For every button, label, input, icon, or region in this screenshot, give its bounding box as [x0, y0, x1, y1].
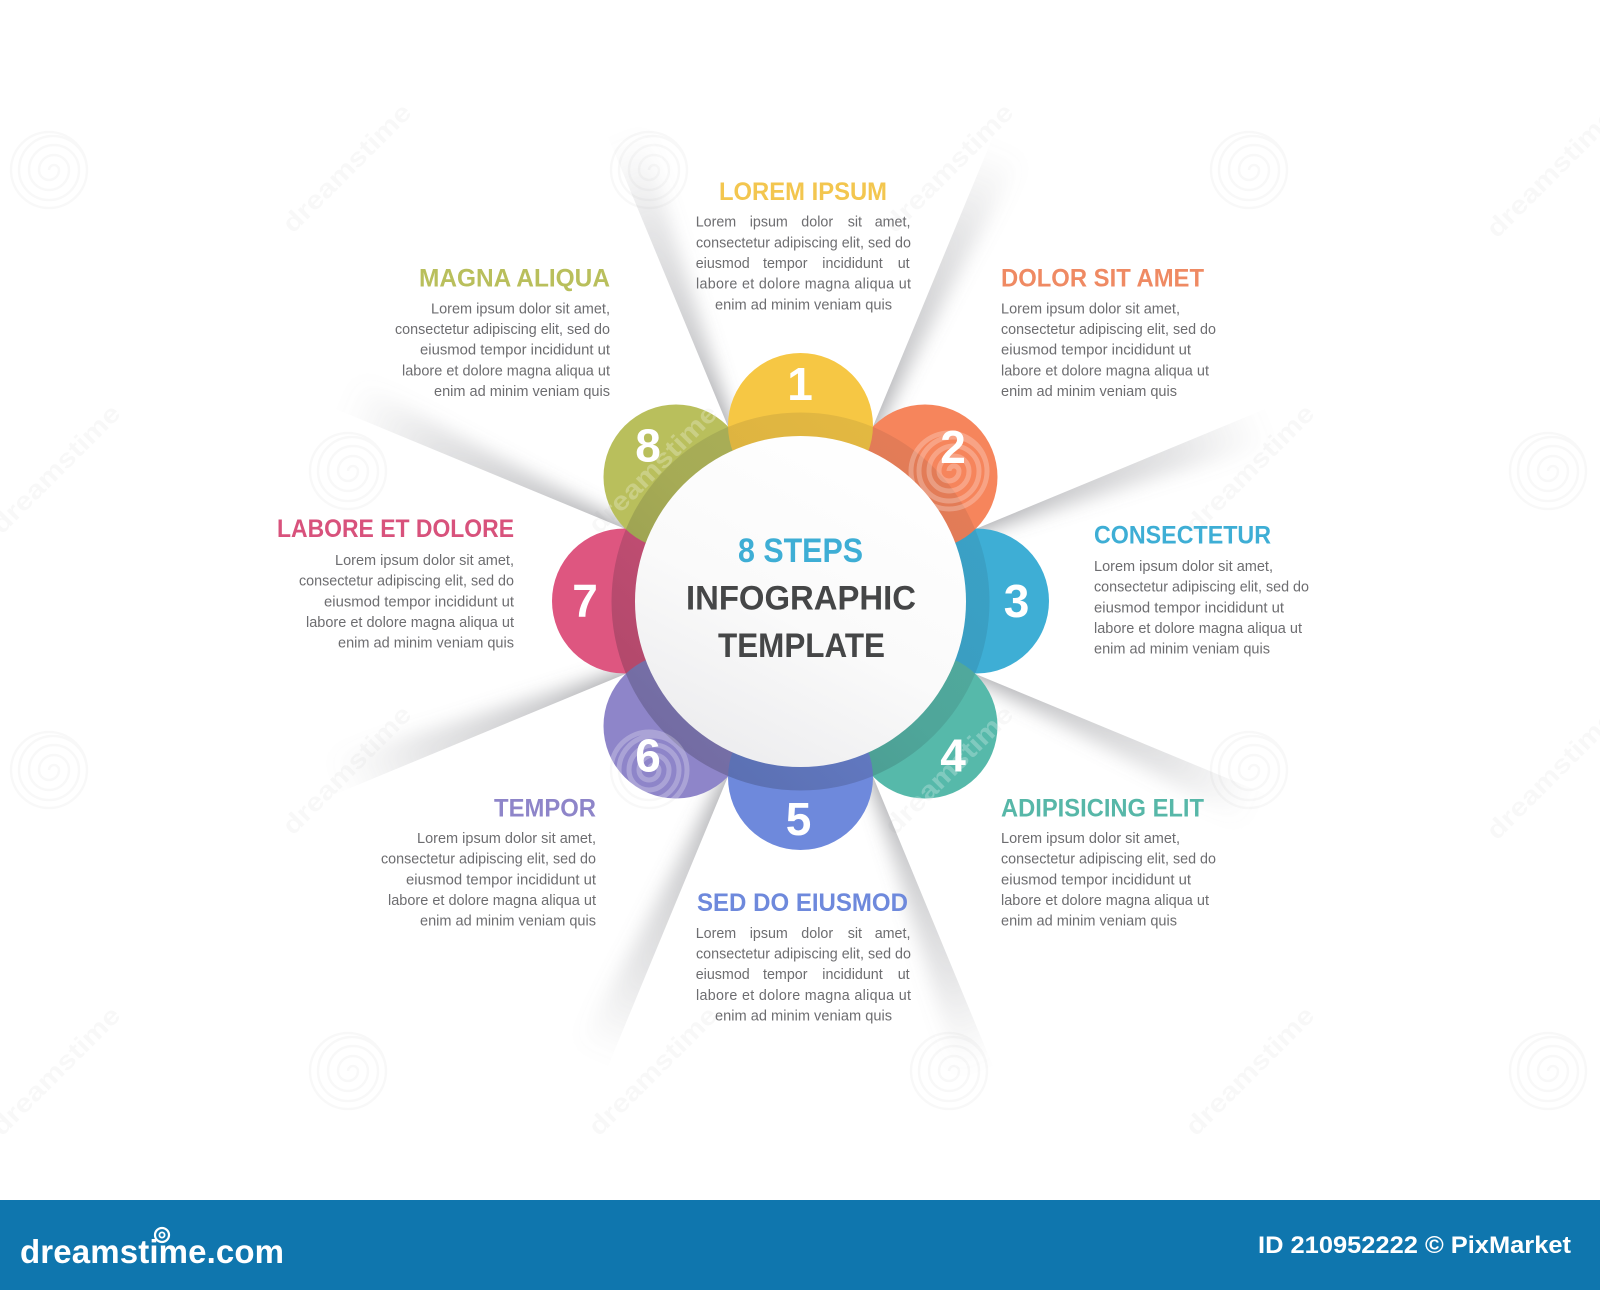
- body: step 5: incididunt: [822, 967, 883, 983]
- heading: dolor sit amet: DOLOR SIT AMET: [1001, 265, 1204, 293]
- heading: consectetur: CONSECTETUR: [1094, 521, 1271, 549]
- body: step 2: enim ad minim veniam quis: [1001, 384, 1177, 400]
- body: step 4: consectetur adipiscing elit, sed do: [1001, 852, 1216, 868]
- centre disc: [635, 436, 966, 767]
- number 6: 6: [635, 730, 661, 782]
- body: step 3: labore et dolore magna aliqua ut: [1094, 621, 1302, 637]
- shadow ray: between steps 3 and 4: [948, 641, 1274, 826]
- body: step 3: enim ad minim veniam quis: [1094, 642, 1270, 658]
- body: step 3: eiusmod tempor incididunt ut: [1094, 600, 1284, 616]
- shadow ray: between steps 2 and 3: [951, 382, 1276, 568]
- step numbers: [572, 358, 1029, 845]
- body: step 2: [1001, 301, 1216, 400]
- number 7: 7: [572, 574, 598, 626]
- body: step 8: [395, 301, 610, 400]
- body: step 7: labore et dolore magna aliqua ut: [306, 615, 514, 631]
- text block: step 2: [1001, 265, 1216, 400]
- text block: step 5: [696, 889, 911, 1024]
- heading: adipisicing elit: ADIPISICING ELIT: [1001, 794, 1204, 822]
- title line: template: TEMPLATE: [718, 627, 885, 665]
- body: step 1: enim ad minim veniam quis: [715, 297, 892, 313]
- body: step 1: tempor: [763, 256, 808, 272]
- title line: 8 steps: 8 STEPS: [738, 532, 863, 570]
- watermark layer under the artwork: dreamstime: [276, 97, 417, 238]
- text block: step 1: [696, 178, 911, 313]
- petal ring: eight numbered circles: [552, 353, 1049, 850]
- watermark layer under the artwork: dreamstime: [1179, 1000, 1320, 1141]
- body: step 3: consectetur adipiscing elit, sed do: [1094, 580, 1309, 596]
- watermark layer under the artwork: dreamstime: [878, 699, 1019, 840]
- petal 2: [852, 404, 998, 550]
- footer bar: [0, 1200, 1600, 1290]
- body: step 3: [1094, 559, 1309, 658]
- body: step 7: [299, 553, 514, 652]
- body: step 1: dolor: [801, 215, 833, 231]
- dark band cast by the centre disc on the petals: [612, 412, 990, 790]
- body: step 1: sit: [848, 215, 862, 231]
- heading: sed do eiusmod: SED DO EIUSMOD: [697, 889, 908, 917]
- footer image id and credit: ID 210952222 © PixMarket: [1258, 1232, 1571, 1259]
- shadow ray: between steps 1 and 2: [840, 128, 1025, 454]
- centre title: [686, 532, 916, 665]
- body: step 1: amet,: [875, 215, 910, 231]
- body: step 2: consectetur adipiscing elit, sed do: [1001, 322, 1216, 338]
- body: step 7: consectetur adipiscing elit, sed do: [299, 574, 514, 590]
- petal 5: [728, 705, 873, 850]
- text block: step 6: [381, 794, 596, 930]
- body: step 5: eiusmod: [696, 967, 750, 983]
- heading: tempor: TEMPOR: [494, 794, 596, 822]
- body: step 5: [696, 926, 911, 1024]
- body: step 5: enim ad minim veniam quis: [715, 1008, 892, 1024]
- body: step 6: labore et dolore magna aliqua ut: [388, 893, 596, 909]
- number 5: 5: [786, 793, 811, 845]
- body: step 5: labore et dolore magna aliqua ut: [696, 988, 911, 1004]
- body: step 8: labore et dolore magna aliqua ut: [402, 363, 610, 379]
- body: step 8: enim ad minim veniam quis: [434, 384, 610, 400]
- body: step 5: dolor: [801, 926, 833, 942]
- heading: lorem ipsum: LOREM IPSUM: [719, 178, 887, 206]
- body: step 5: consectetur adipiscing elit, sed do: [696, 946, 911, 962]
- text block: step 3: [1094, 521, 1309, 658]
- body: step 5: amet,: [875, 926, 910, 942]
- icon: small spiral above the logo: [155, 1228, 169, 1242]
- body: step 1: eiusmod: [696, 256, 750, 272]
- body: step 1: ut: [898, 256, 910, 272]
- body: step 6: [381, 831, 596, 930]
- body: step 1: Lorem: [696, 215, 736, 231]
- body: step 1: labore et dolore magna aliqua ut: [696, 277, 911, 293]
- body: step 4: Lorem ipsum dolor sit amet,: [1001, 831, 1180, 847]
- text block: step 7: [277, 515, 514, 652]
- body: step 5: ut: [898, 967, 910, 983]
- watermark layer under the artwork: dreamstime: [1179, 398, 1320, 539]
- body: step 2: eiusmod tempor incididunt ut: [1001, 343, 1191, 359]
- body: step 5: Lorem: [696, 926, 736, 942]
- petal 4: [852, 654, 998, 798]
- petal 8: [604, 404, 748, 550]
- body: step 8: eiusmod tempor incididunt ut: [420, 343, 610, 359]
- body: step 1: incididunt: [822, 256, 883, 272]
- body: step 5: tempor: [763, 967, 808, 983]
- petal 6: [604, 654, 748, 798]
- body: step 6: eiusmod tempor incididunt ut: [406, 872, 596, 888]
- watermark highlights over the petals: dreamstime: [582, 398, 723, 539]
- petal 7: [552, 528, 697, 674]
- body: step 8: consectetur adipiscing elit, sed do: [395, 322, 610, 338]
- body: step 4: enim ad minim veniam quis: [1001, 914, 1177, 930]
- body: step 5: ipsum: [750, 926, 788, 942]
- number 8: 8: [635, 420, 661, 472]
- watermark layer under the artwork: dreamstime: [582, 398, 723, 539]
- watermark layer under the artwork: dreamstime: [582, 1000, 723, 1141]
- body: step 5: sit: [848, 926, 862, 942]
- watermark highlights over the petals: dreamstime: [878, 699, 1019, 840]
- body: step 7: enim ad minim veniam quis: [338, 636, 514, 652]
- body: step 7: Lorem ipsum dolor sit amet,: [335, 553, 514, 569]
- shadow ray: between steps 7 and 8: [327, 377, 653, 562]
- shadow ray: between steps 4 and 5: [834, 752, 1020, 1077]
- body: step 4: [1001, 831, 1216, 930]
- shadow ray: between steps 5 and 6: [576, 749, 761, 1075]
- watermark highlights over the petals: [609, 410, 998, 798]
- petal 3: [904, 528, 1049, 674]
- petal 1: [728, 353, 873, 498]
- text block: step 4: [1001, 794, 1216, 930]
- body: step 2: Lorem ipsum dolor sit amet,: [1001, 301, 1180, 317]
- body: step 1: consectetur adipiscing elit, sed do: [696, 235, 911, 251]
- body: step 1: ipsum: [750, 215, 788, 231]
- body: step 8: Lorem ipsum dolor sit amet,: [431, 301, 610, 317]
- watermark layer under the artwork: dreamstime: [878, 97, 1019, 238]
- body: step 6: enim ad minim veniam quis: [420, 914, 596, 930]
- body: step 6: Lorem ipsum dolor sit amet,: [417, 831, 596, 847]
- title line: infographic: INFOGRAPHIC: [686, 580, 916, 618]
- watermark layer under the artwork: dreamstime: [276, 699, 417, 840]
- shadow ray: between steps 8 and 1: [581, 126, 767, 451]
- heading: labore et dolore: LABORE ET DOLORE: [277, 515, 514, 543]
- shadow ray: between steps 6 and 7: [325, 635, 650, 821]
- heading: magna aliqua: MAGNA ALIQUA: [419, 265, 610, 293]
- body: step 4: labore et dolore magna aliqua ut: [1001, 893, 1209, 909]
- number 3: 3: [1004, 575, 1029, 627]
- footer logo: dreamstime.com: dreamstime.com: [20, 1233, 284, 1270]
- number 2: 2: [940, 421, 966, 473]
- text block: step 8: [395, 265, 610, 400]
- number 1: 1: [787, 358, 813, 410]
- body: step 7: eiusmod tempor incididunt ut: [324, 594, 514, 610]
- body: step 6: consectetur adipiscing elit, sed do: [381, 852, 596, 868]
- body: step 2: labore et dolore magna aliqua ut: [1001, 363, 1209, 379]
- body: step 3: Lorem ipsum dolor sit amet,: [1094, 559, 1273, 575]
- body: step 4: eiusmod tempor incididunt ut: [1001, 872, 1191, 888]
- number 4: 4: [940, 730, 966, 782]
- body: step 1: [696, 215, 911, 313]
